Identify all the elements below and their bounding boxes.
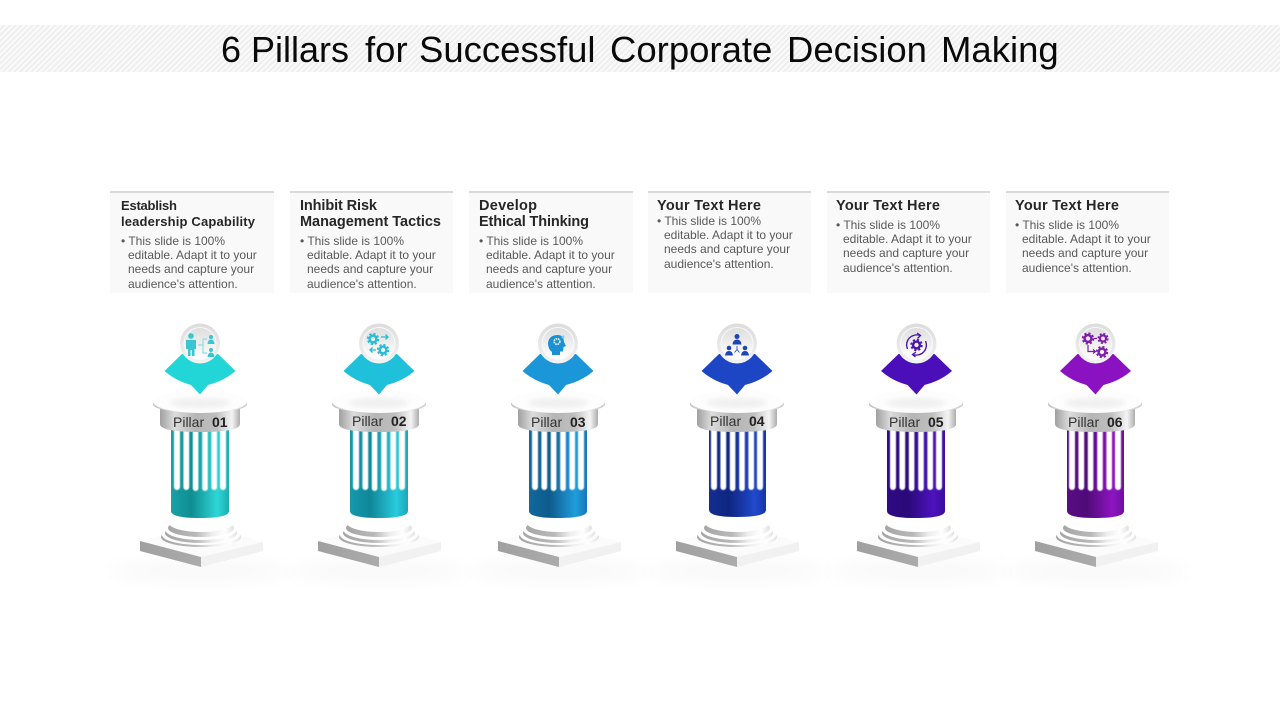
- body: pillar 02: • This slide is 100%: [300, 234, 404, 248]
- body: pillar 01: audience's attention.: [128, 277, 238, 291]
- column: pillar 03: [529, 424, 587, 518]
- panel: pillar 02 text: [290, 191, 453, 293]
- marker: pillar 03: [522, 354, 594, 394]
- body: pillar 05: needs and capture your: [843, 246, 969, 260]
- title: Decision: [787, 29, 927, 70]
- marker: pillar 02: [344, 354, 414, 394]
- label: pillar 06: 06: [1107, 414, 1123, 430]
- body: pillar 03: • This slide is 100%: [479, 234, 583, 248]
- title band: [0, 25, 1280, 72]
- body: pillar 03: editable. Adapt it to your: [486, 248, 615, 262]
- column: pillar 04: [709, 424, 766, 517]
- body: pillar 01: • This slide is 100%: [121, 234, 225, 248]
- pillar 04: [645, 324, 829, 582]
- body: pillar 05: editable. Adapt it to your: [843, 232, 972, 246]
- icon disc: pillar 04: [717, 324, 757, 364]
- title: Making: [941, 29, 1059, 70]
- body: pillar 06: • This slide is 100%: [1015, 218, 1119, 232]
- body: pillar 04: audience's attention.: [664, 257, 774, 271]
- capital: pillar 06: [1048, 390, 1142, 432]
- base: pillar 05: [826, 514, 1010, 582]
- heading: pillar 06: Your Text Here: [1015, 198, 1119, 214]
- heading: pillar 02: [300, 198, 441, 230]
- icon: head with gear: [548, 335, 566, 355]
- panel: pillar 05 text: [827, 191, 990, 293]
- icon disc: pillar 01: [180, 324, 220, 364]
- body: pillar 02: audience's attention.: [307, 277, 417, 291]
- panel: pillar 03 text: [469, 191, 633, 293]
- body: pillar 02: editable. Adapt it to your: [307, 248, 436, 262]
- marker: pillar 01: [164, 354, 236, 394]
- body: pillar 01: needs and capture your: [128, 262, 254, 276]
- heading: pillar 02: Management Tactics: [300, 214, 441, 230]
- heading: pillar 01: Establish: [121, 198, 177, 213]
- body: pillar 05: • This slide is 100%: [836, 218, 940, 232]
- label: pillar 05: Pillar: [889, 414, 920, 430]
- heading: pillar 03: [479, 198, 589, 230]
- label: pillar 04: 04: [749, 413, 765, 429]
- column: pillar 06: [1067, 424, 1124, 518]
- icon disc: pillar 06: [1076, 324, 1116, 364]
- heading: pillar 04: Your Text Here: [657, 198, 761, 214]
- label: pillar 01: 01: [212, 414, 228, 430]
- label: pillar 04: Pillar: [710, 413, 741, 429]
- pillar 01: [109, 324, 293, 582]
- panel: pillar 04 text: [648, 191, 811, 293]
- capital: pillar 05: [869, 390, 963, 432]
- base: pillar 02: [287, 514, 471, 582]
- label: pillar 05: 05: [928, 414, 944, 430]
- icon disc: pillar 05: [896, 324, 936, 364]
- panel: pillar 06 text: [1006, 191, 1169, 293]
- pillar 05: [826, 324, 1010, 582]
- body: pillar 04: editable. Adapt it to your: [664, 228, 793, 242]
- label: pillar 02: Pillar: [352, 413, 383, 429]
- heading: pillar 03: Ethical Thinking: [479, 214, 589, 230]
- icon: team hierarchy: [725, 334, 749, 356]
- icon: process gears: [1083, 333, 1108, 357]
- body: pillar 02: needs and capture your: [307, 262, 433, 276]
- pillar 06: [1004, 324, 1188, 582]
- icon disc: pillar 02: [359, 324, 399, 364]
- column: pillar 01: [171, 424, 229, 518]
- title: Successful: [419, 29, 596, 70]
- icon: people network: [186, 333, 214, 357]
- body: pillar 06: audience's attention.: [1022, 261, 1132, 275]
- body: pillar 04: needs and capture your: [664, 242, 790, 256]
- column: pillar 02: [350, 424, 408, 518]
- heading: pillar 03: Develop: [479, 198, 537, 214]
- marker: pillar 05: [881, 354, 952, 394]
- panel: pillar 01 text: [110, 191, 274, 293]
- title: 6 Pillars: [221, 29, 349, 70]
- heading: pillar 05: Your Text Here: [836, 198, 940, 214]
- pillar 03: [467, 324, 651, 582]
- base: pillar 01: [109, 514, 293, 582]
- icon: gear with rotating arrows: [907, 333, 926, 357]
- base: pillar 06: [1004, 514, 1188, 582]
- title: for: [365, 29, 408, 70]
- heading: pillar 01: [121, 198, 256, 229]
- icon disc: pillar 03: [538, 324, 578, 364]
- capital: pillar 03: [511, 390, 605, 432]
- column: pillar 05: [887, 424, 945, 518]
- label: pillar 03: Pillar: [531, 414, 562, 430]
- capital: pillar 01: [153, 390, 247, 432]
- label: pillar 03: 03: [570, 414, 586, 430]
- base: pillar 03: [467, 514, 651, 582]
- icon: gears cycle: [368, 334, 388, 355]
- pillar 02: [287, 324, 471, 582]
- capital: pillar 02: [332, 390, 426, 432]
- body: pillar 04: • This slide is 100%: [657, 214, 761, 228]
- body: pillar 03: needs and capture your: [486, 262, 612, 276]
- label: pillar 01: Pillar: [173, 414, 204, 430]
- body: pillar 06: editable. Adapt it to your: [1022, 232, 1151, 246]
- body: pillar 06: needs and capture your: [1022, 246, 1148, 260]
- body: pillar 03: audience's attention.: [486, 277, 596, 291]
- marker: pillar 04: [702, 354, 772, 394]
- label: pillar 06: Pillar: [1068, 414, 1099, 430]
- heading: pillar 01: leadership Capability: [121, 214, 256, 229]
- title: Corporate: [610, 29, 772, 70]
- body: pillar 05: audience's attention.: [843, 261, 953, 275]
- heading: pillar 02: Inhibit Risk: [300, 198, 378, 214]
- label: pillar 02: 02: [391, 413, 407, 429]
- base: pillar 04: [645, 514, 829, 582]
- marker: pillar 06: [1060, 354, 1131, 394]
- capital: pillar 04: [690, 390, 784, 432]
- body: pillar 01: editable. Adapt it to your: [128, 248, 257, 262]
